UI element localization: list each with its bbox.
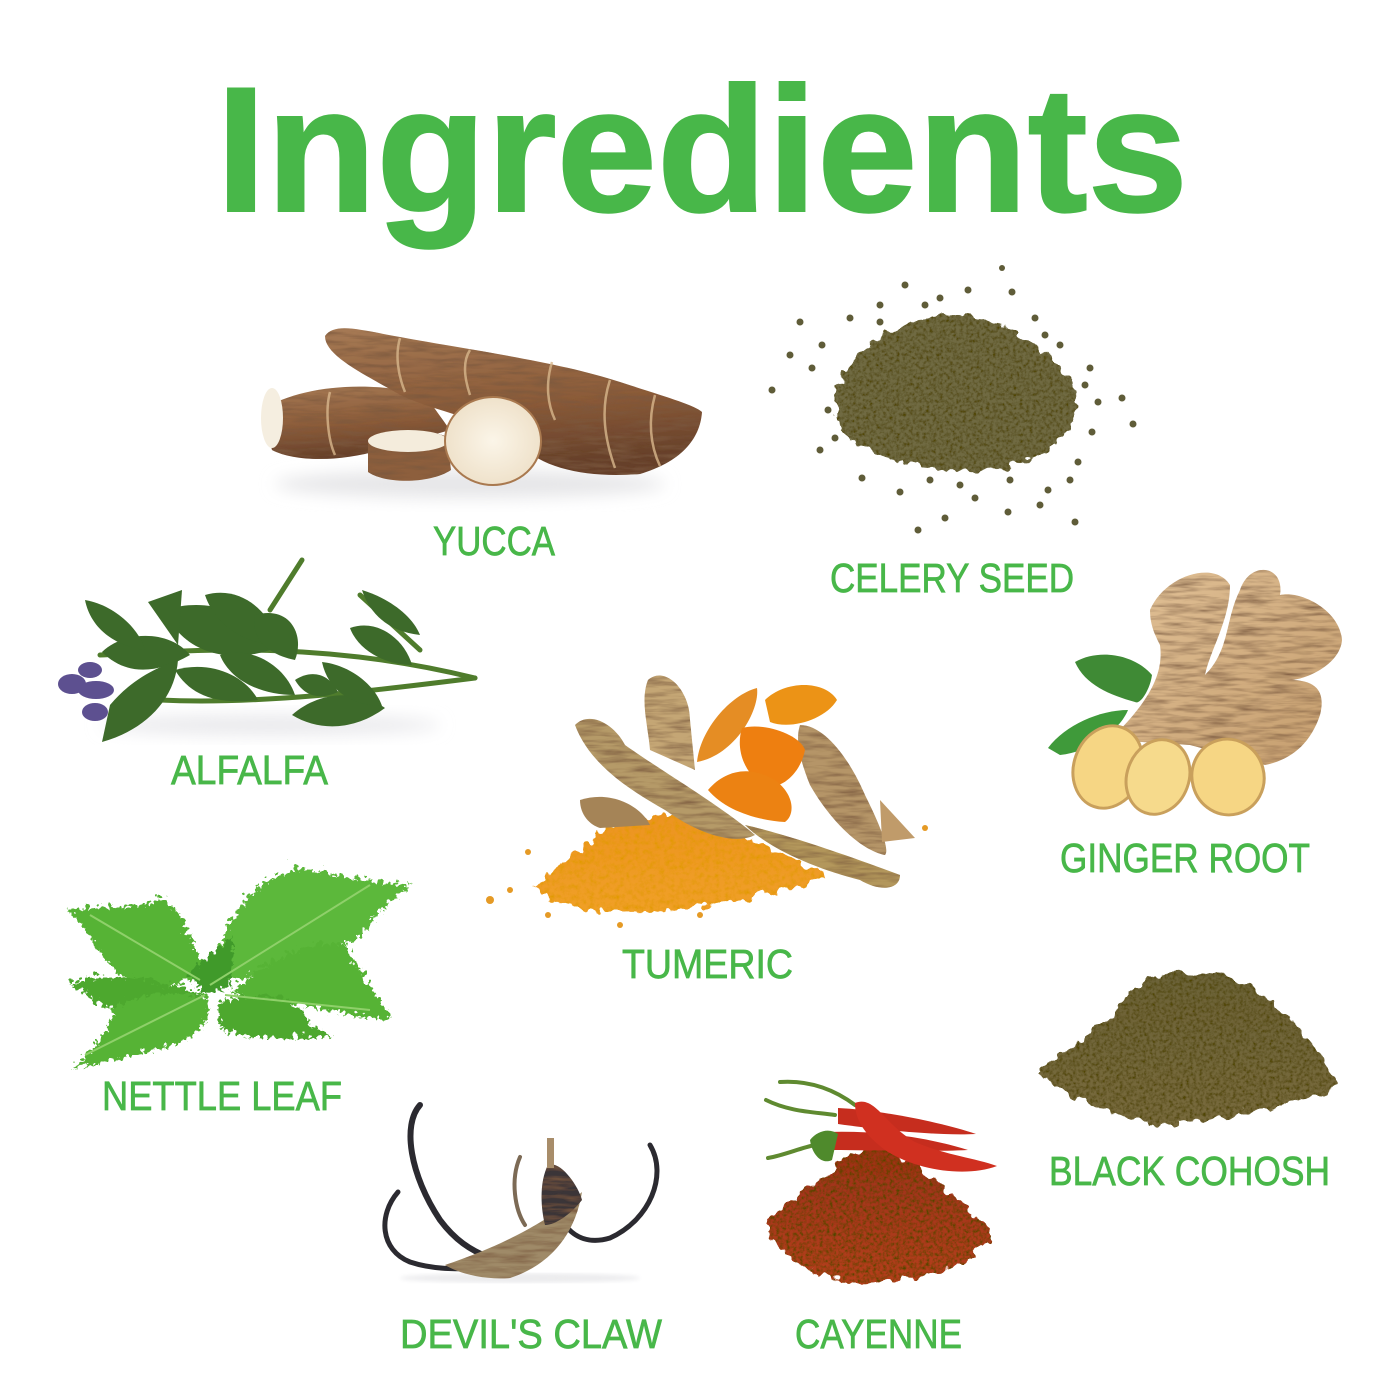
label: cayenne: CAYENNE: [795, 1311, 962, 1357]
icon: cayenne powder and chilis: [765, 1082, 997, 1283]
icon: yucca roots: [261, 328, 702, 498]
icon: nettle leaves: [62, 865, 408, 1065]
ingredient: alfalfa: [58, 560, 475, 793]
icon: black cohosh powder: [1035, 972, 1338, 1124]
label: ginger root: GINGER ROOT: [1060, 835, 1310, 881]
label: yucca: YUCCA: [433, 518, 556, 564]
icon: alfalfa sprig: [58, 560, 475, 742]
label: alfalfa: ALFALFA: [171, 747, 329, 793]
icon: celery seed pile: [768, 265, 1136, 534]
label: tumeric: TUMERIC: [622, 941, 793, 987]
ingredient: black cohosh: [1035, 972, 1338, 1194]
label: celery seed: CELERY SEED: [830, 555, 1074, 601]
label: nettle leaf: NETTLE LEAF: [102, 1073, 342, 1119]
title: Ingredients: [216, 50, 1188, 249]
icon: tumeric roots and powder: [486, 676, 928, 928]
label: devil's claw: DEVIL'S CLAW: [400, 1311, 662, 1357]
ingredient: tumeric: [486, 676, 928, 987]
icon: devil's claw seed pod: [385, 1105, 657, 1283]
ingredient: ginger root: [1048, 570, 1342, 881]
ingredient: devil's claw: [385, 1105, 662, 1357]
ingredient: nettle leaf: [62, 865, 408, 1119]
ingredient: celery seed: [768, 265, 1136, 601]
ingredient: cayenne: [765, 1082, 997, 1283]
label: black cohosh: BLACK COHOSH: [1049, 1148, 1330, 1194]
icon: ginger root: [1048, 570, 1342, 823]
ingredient: yucca: [261, 328, 702, 564]
